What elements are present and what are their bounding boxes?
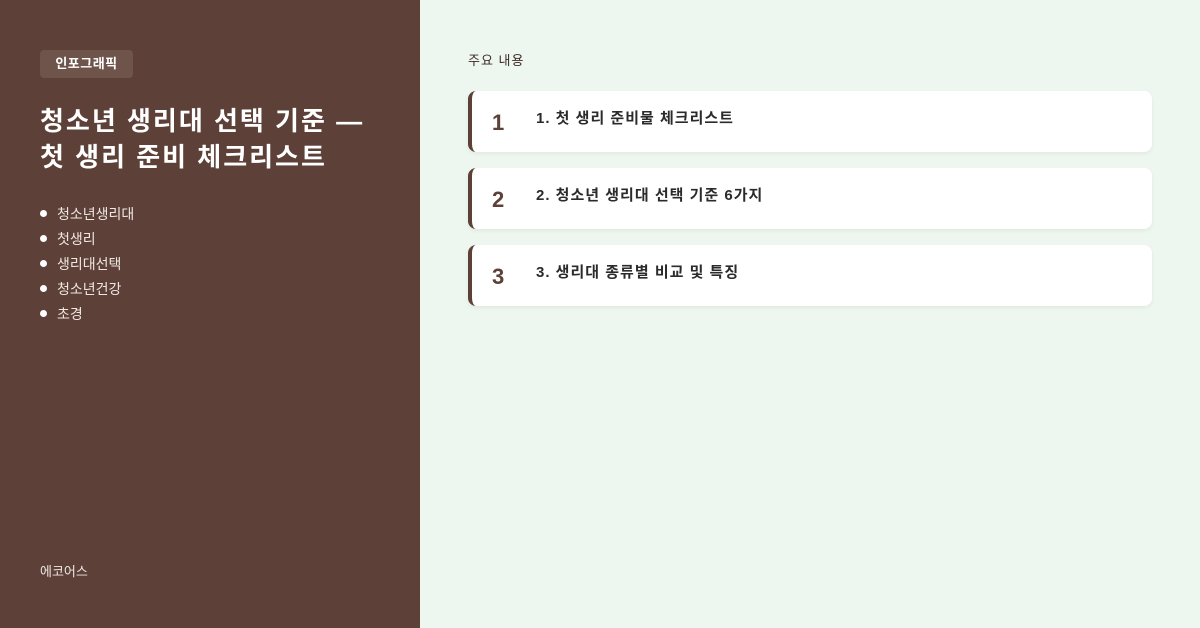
title <box>40 106 364 172</box>
brand: 에코어스 <box>40 564 88 579</box>
tag list: 초경 <box>57 306 83 322</box>
card 3: 3. 생리대 종류별 비교 및 특징 <box>536 264 739 281</box>
card 2 <box>468 168 1152 229</box>
tag list: 생리대선택 <box>57 256 121 272</box>
badge <box>40 50 133 78</box>
card 3 <box>468 245 1152 306</box>
tag list: 청소년생리대 <box>57 206 134 222</box>
title: 청소년 생리대 선택 기준 — <box>40 106 364 136</box>
card 3: 3 <box>492 264 504 289</box>
tag list: 청소년건강 <box>57 281 121 297</box>
card 2: 2 <box>492 187 504 212</box>
badge: 인포그래픽 <box>55 56 118 71</box>
card 1 <box>468 91 1152 152</box>
card 1: 1. 첫 생리 준비물 체크리스트 <box>536 110 734 127</box>
card 2: 2. 청소년 생리대 선택 기준 6가지 <box>536 187 763 204</box>
left panel <box>0 0 420 628</box>
title: 첫 생리 준비 체크리스트 <box>40 142 327 172</box>
section heading: 주요 내용 <box>468 53 524 68</box>
tag list: 첫생리 <box>57 231 96 247</box>
card 1: 1 <box>492 110 504 135</box>
tag list <box>40 206 134 322</box>
